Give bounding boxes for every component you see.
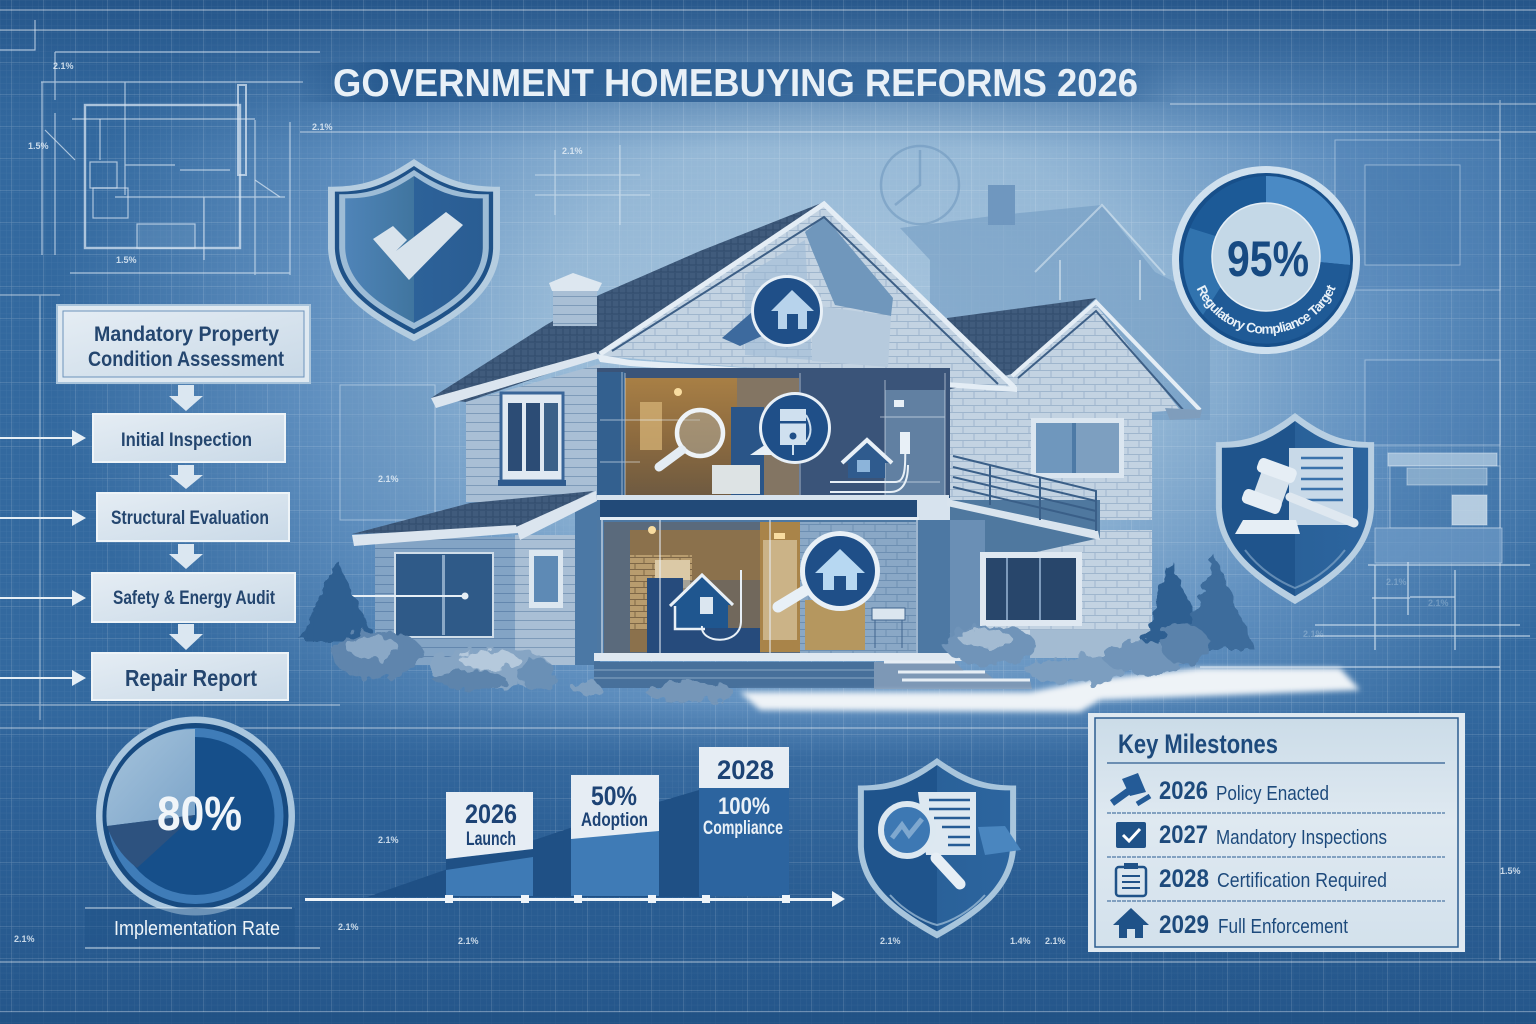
blueprint floor plan: 1.5% (116, 255, 137, 265)
icon: gavel (1235, 457, 1354, 534)
shield: gavel and document (1216, 413, 1374, 604)
side input arrows (0, 430, 86, 686)
bar: 50% adoption: 50% (591, 781, 637, 811)
chart: adoption timeline (305, 747, 845, 907)
blueprint floor plan: 2.1% (312, 122, 333, 132)
flow step: mandatory property condition assessment: Mandatory Property (94, 323, 279, 346)
icon: lower house badge (778, 531, 880, 611)
icon: magnifier (881, 804, 960, 884)
icon: document (1289, 448, 1353, 525)
house: floor band (597, 495, 950, 522)
title: GOVERNMENT HOMEBUYING REFORMS 2026 (333, 62, 1138, 105)
blueprint dimension labels: 2.1% (14, 934, 35, 944)
milestone: 2027 mandatory inspections (1116, 821, 1387, 849)
bar: 2026 launch: 2026 (465, 799, 517, 829)
flow step: structural evaluation: Structural Evaluation (111, 508, 269, 529)
bar: 2026 launch (446, 792, 533, 896)
blueprint panels right: 2.1% (1428, 598, 1449, 608)
blueprint dimension labels: 1.5% (1500, 866, 1521, 876)
bar: 50% adoption (571, 775, 659, 896)
blueprint floor plan (0, 20, 333, 275)
panel: key milestones (1088, 713, 1465, 952)
gauge: regulatory compliance target: 95% (1227, 231, 1309, 287)
blueprint dimension labels: 1.4% (1010, 936, 1031, 946)
arrow (169, 385, 203, 411)
bar: 2028 full compliance: 2028 (717, 755, 774, 785)
flow step: repair report: Repair Report (125, 665, 257, 691)
label: implementation rate (85, 908, 320, 948)
icon: lower small house (670, 570, 741, 640)
house: left wing upper floor (431, 352, 600, 502)
icon: report (918, 792, 1021, 855)
heading: key milestones: Key Milestones (1118, 729, 1278, 759)
icon: attic house badge (722, 275, 823, 347)
arrow (169, 624, 203, 650)
blueprint panels right (340, 140, 1530, 667)
flow step: initial inspection (93, 414, 285, 462)
house: upper interior (597, 368, 950, 500)
label: implementation rate: Implementation Rate (114, 918, 280, 940)
milestone: 2026 policy enacted: Policy Enacted (1216, 783, 1329, 805)
arrow (169, 465, 203, 489)
timeline axis (305, 891, 845, 907)
bar: 2026 launch: Launch (466, 829, 516, 850)
blueprint floor plan: 2.1% (53, 61, 74, 71)
icon: small house (830, 432, 910, 492)
gauge: regulatory compliance target (1172, 166, 1360, 354)
bar: 50% adoption: Adoption (581, 810, 648, 831)
milestone: 2029 full enforcement: Full Enforcement (1218, 916, 1348, 938)
milestone: 2027 mandatory inspections: 2027 (1159, 821, 1208, 849)
icon: water heater badge (750, 392, 831, 464)
milestone: 2028 certification required (1116, 863, 1387, 896)
milestone: 2027 mandatory inspections: Mandatory Inspections (1216, 827, 1387, 849)
house illustration (300, 202, 1360, 712)
milestone: 2028 certification required: Certification Required (1217, 870, 1387, 892)
flow chart: property condition assessment (57, 305, 310, 700)
blueprint dimension labels: 2.1% (378, 474, 399, 484)
flow step: mandatory property condition assessment (57, 305, 310, 383)
gauge: implementation rate: 80% (157, 788, 242, 841)
flow step: structural evaluation (97, 493, 289, 541)
faded background house and clock: 2.1% (562, 146, 583, 156)
milestone: 2028 certification required: 2028 (1159, 865, 1209, 893)
milestone: 2026 policy enacted: 2026 (1159, 777, 1208, 805)
blueprint dimension labels: 2.1% (1045, 936, 1066, 946)
blueprint dimension labels: 2.1% (378, 835, 399, 845)
flow step: mandatory property condition assessment: Condition Assessment (88, 348, 284, 371)
house: porch and steps (594, 630, 1152, 689)
gauge: regulatory compliance target: Regulatory Compliance Target (1196, 284, 1336, 336)
gauge: implementation rate (96, 716, 295, 916)
milestone: 2026 policy enacted (1112, 773, 1329, 805)
flow step: repair report (92, 653, 288, 700)
blueprint panels right: 2.1% (1386, 577, 1407, 587)
shield: checkmark (328, 159, 500, 341)
house: chimney (549, 273, 602, 326)
flow step: safety and energy audit: Safety & Energy Audit (113, 588, 276, 609)
icon: check mark (373, 212, 463, 280)
bushes and trees (300, 555, 1255, 702)
milestone: 2029 full enforcement (1113, 908, 1348, 939)
house: gable (600, 207, 1012, 388)
house: garage (330, 491, 600, 665)
house: balcony railing (947, 456, 1100, 540)
house: ground interior (597, 520, 950, 655)
icon: magnifier (659, 410, 723, 467)
blueprint panels right: 2.1% (1303, 629, 1324, 639)
bar: 2028 full compliance (699, 747, 789, 896)
house: right wing (947, 298, 1202, 655)
blueprint dimension labels (14, 474, 1521, 946)
blueprint dimension labels: 2.1% (880, 936, 901, 946)
house: main roof (431, 202, 824, 402)
bar: 2028 full compliance: Compliance (703, 818, 783, 839)
milestone: 2029 full enforcement: 2029 (1159, 911, 1209, 939)
bar: 2028 full compliance: 100% (718, 793, 770, 820)
shield: magnifier and report (858, 758, 1021, 939)
arrow (169, 544, 203, 569)
ground snow (740, 668, 1360, 712)
flow step: safety and energy audit (92, 573, 295, 622)
blueprint floor plan: 1.5% (28, 141, 49, 151)
blueprint dimension labels: 2.1% (458, 936, 479, 946)
flow step: initial inspection: Initial Inspection (121, 430, 252, 451)
faded background house and clock (535, 145, 1210, 420)
blueprint dimension labels: 2.1% (338, 922, 359, 932)
